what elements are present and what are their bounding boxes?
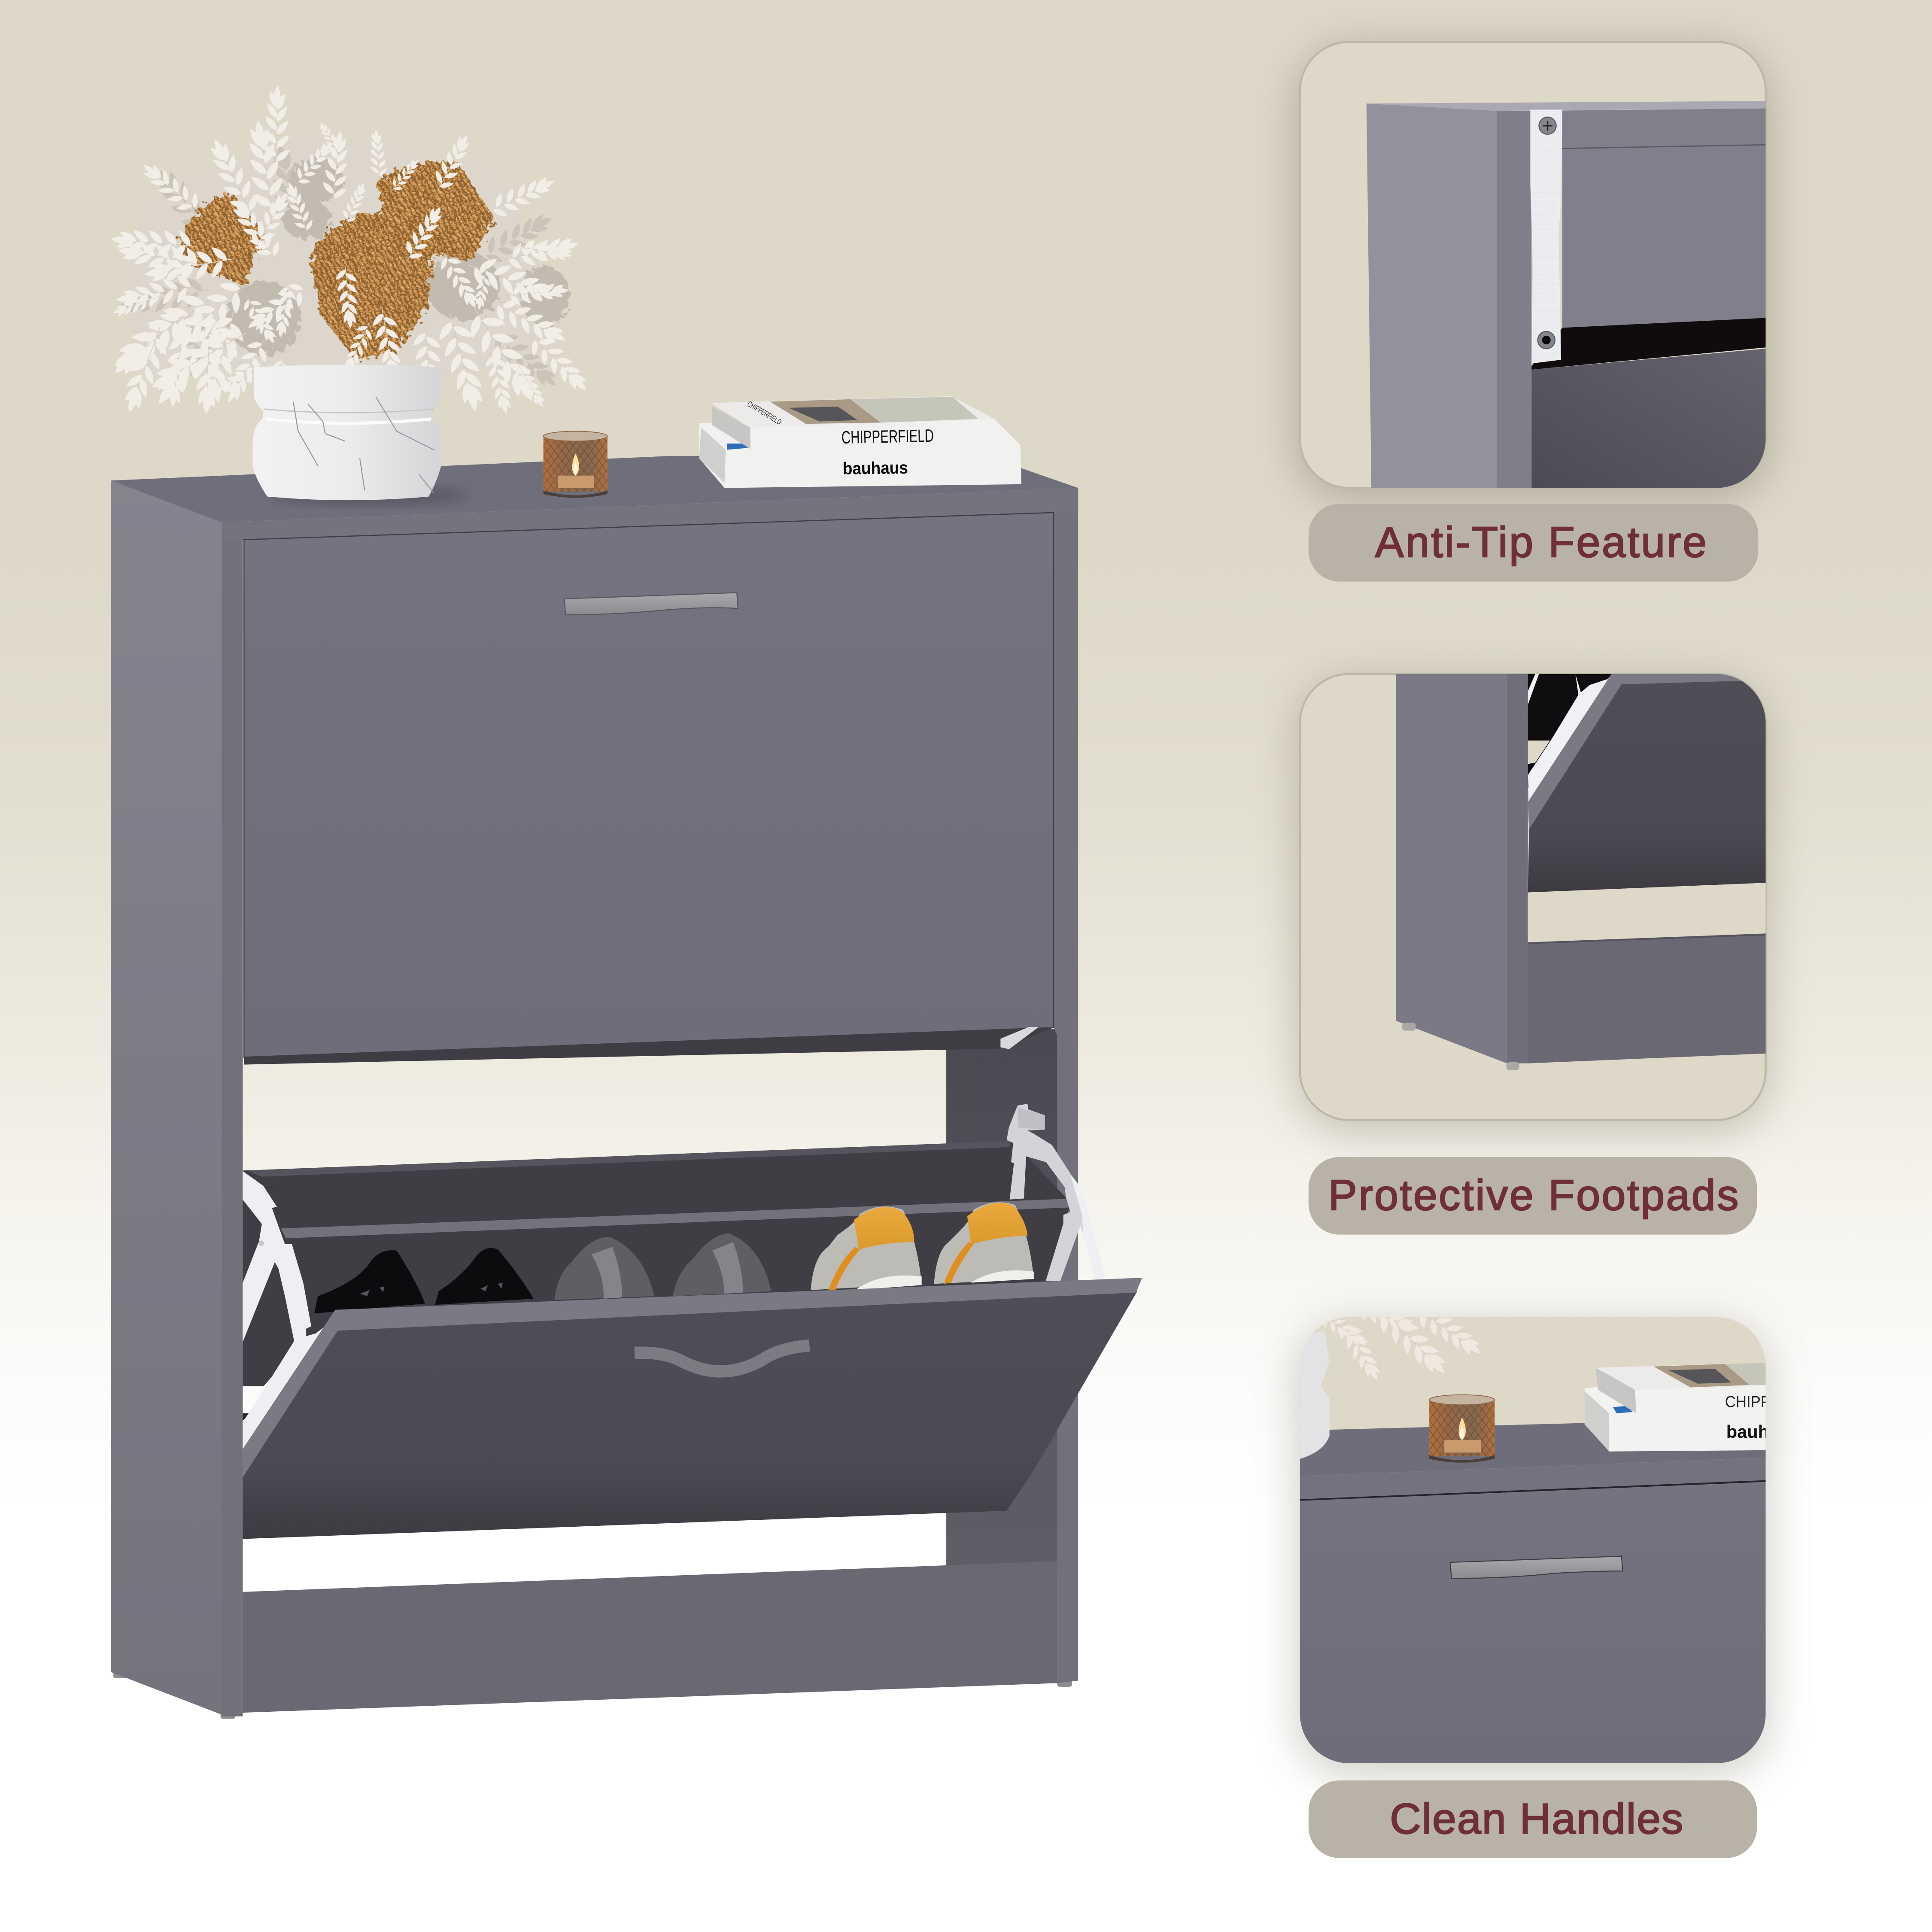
- left front stile: [222, 520, 243, 1716]
- stacked books: CHIPPERFIELD: [841, 425, 934, 447]
- stacked books: [699, 396, 1021, 488]
- label: anti-tip feature: [1309, 504, 1758, 582]
- left hinge: [243, 1171, 319, 1449]
- panel: anti-tip feature: [1296, 42, 1769, 500]
- panel: clean handles: [1296, 1294, 1779, 1776]
- stacked books fragment: [1585, 1363, 1779, 1452]
- cabinet top: [1300, 1418, 1766, 1476]
- right inner side panel: [946, 1029, 1060, 1571]
- grey shoes: [554, 1237, 654, 1300]
- marble vase: [252, 365, 441, 500]
- orange berry clusters: [180, 161, 495, 360]
- open drawer interior: [243, 1141, 1069, 1421]
- diagonal door support: [1007, 1435, 1057, 1510]
- divider strip: [281, 1199, 1069, 1238]
- black shoes: [314, 1250, 425, 1313]
- shadow leaf sprigs: [117, 141, 566, 408]
- label: protective footpads: [1309, 1157, 1757, 1235]
- left droop: [114, 270, 200, 316]
- bottom plinth: [243, 1561, 1057, 1713]
- stacked books fragment: bauha: [1726, 1422, 1779, 1442]
- grey tufts: [227, 158, 569, 355]
- panel: protective footpads: [1296, 674, 1769, 1132]
- side and front of cabinet: [1367, 103, 1497, 488]
- cabinet side panel: [111, 480, 223, 1715]
- white leaf sprigs: [102, 85, 596, 418]
- candle holder: [1429, 1395, 1495, 1463]
- footpads: [1402, 1023, 1416, 1031]
- foliage base: [129, 138, 561, 376]
- plinth: [1528, 933, 1766, 1063]
- right front stile: [1054, 488, 1078, 1683]
- bottom book: [699, 419, 1021, 488]
- drawer handle: [1450, 1556, 1623, 1578]
- top rail: [222, 488, 1078, 540]
- right droop: [521, 325, 596, 401]
- label: protective footpads: Protective Footpads: [1328, 1171, 1738, 1219]
- book titles: CHIPPERFIELD: [746, 399, 783, 426]
- vase fragment: [1300, 1331, 1330, 1459]
- label: clean handles: [1309, 1780, 1757, 1858]
- stacked books: bauhaus: [843, 458, 908, 478]
- label: clean handles: Clean Handles: [1390, 1795, 1683, 1843]
- drawer front: [1300, 1482, 1766, 1763]
- cabinet top surface: [111, 456, 1078, 522]
- top book: [711, 396, 994, 428]
- right hinge: [1007, 1104, 1106, 1281]
- label: anti-tip feature: Anti-Tip Feature: [1375, 518, 1707, 566]
- lower door handle: [635, 1346, 810, 1371]
- upper door handle: [564, 592, 738, 615]
- sneakers: [811, 1206, 922, 1290]
- leaves fragment: [1315, 1294, 1489, 1387]
- candle holder: [544, 431, 608, 498]
- vase shadow: [271, 486, 468, 505]
- cabinet feet: [113, 1666, 1072, 1719]
- stacked books fragment: CHIPP: [1725, 1392, 1771, 1410]
- anti-tip strap: [1530, 109, 1562, 364]
- lower tilted door: [243, 1278, 1142, 1539]
- upper door: [244, 513, 1054, 1065]
- central sprigs: [337, 319, 379, 377]
- marble veins: [293, 397, 434, 493]
- flower arrangement: [102, 85, 596, 418]
- top sprigs: [260, 85, 293, 168]
- shoes: [314, 1202, 1034, 1313]
- shoe cabinet: [111, 456, 1142, 1719]
